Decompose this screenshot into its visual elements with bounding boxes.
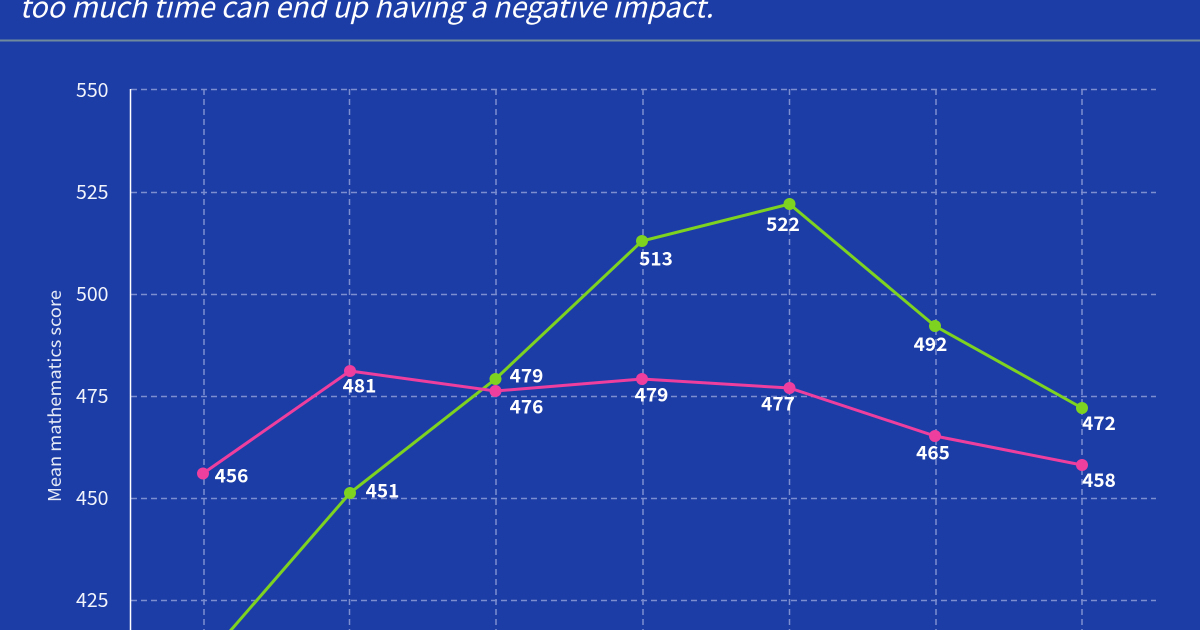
- data labels: 476: [510, 392, 543, 420]
- data labels: 477: [761, 390, 795, 416]
- data labels: 458: [1082, 466, 1116, 493]
- data labels: 451: [366, 476, 399, 504]
- y axis tick labels: 500: [76, 278, 108, 307]
- data labels: 465: [916, 438, 950, 466]
- data labels: 481: [343, 372, 376, 398]
- y axis tick labels: 525: [76, 176, 108, 205]
- y axis line: [130, 89, 132, 630]
- y axis tick labels: 475: [76, 380, 108, 409]
- data labels: 522: [766, 210, 800, 237]
- data labels: 513: [639, 244, 673, 272]
- data labels: 492: [914, 330, 947, 357]
- data labels: 479: [510, 362, 543, 388]
- y axis tick labels: 550: [76, 74, 108, 103]
- pink series line: [197, 365, 1088, 480]
- green series line: [218, 198, 1088, 630]
- y axis tick labels: 425: [76, 584, 108, 613]
- y axis title: Mean mathematics score: [42, 290, 67, 502]
- data labels: 479: [635, 380, 668, 408]
- y axis tick labels: 450: [76, 482, 108, 511]
- data labels: [215, 210, 1116, 504]
- y axis tick labels: [76, 74, 108, 613]
- data labels: 472: [1082, 409, 1116, 436]
- data labels: 456: [215, 462, 248, 488]
